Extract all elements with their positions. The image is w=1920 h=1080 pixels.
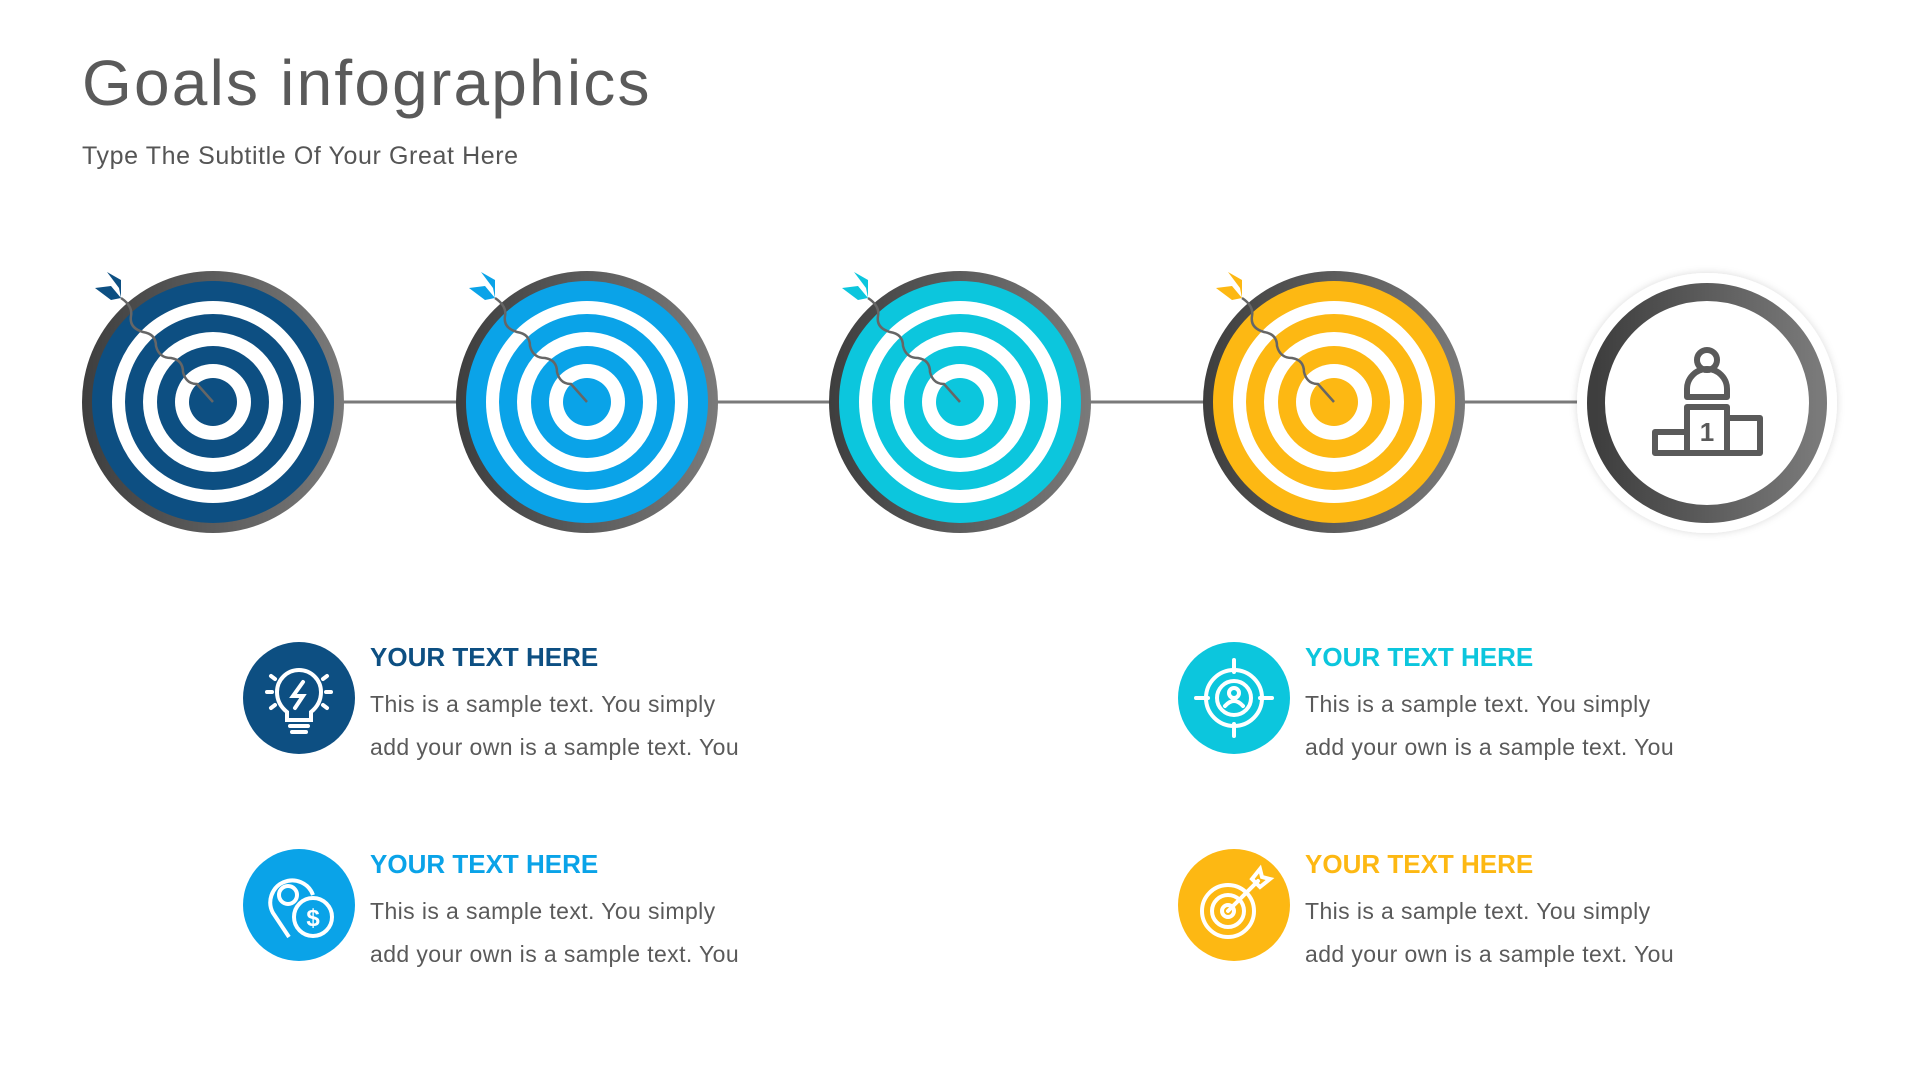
icon: target person bbox=[1178, 642, 1290, 754]
item 4 bbox=[1178, 849, 1674, 967]
subtitle: Type The Subtitle Of Your Great Here bbox=[82, 142, 519, 170]
targets row bbox=[82, 270, 1840, 536]
target 2 bbox=[456, 271, 718, 533]
icon: location money bbox=[243, 849, 355, 961]
final goal podium circle: 1 bbox=[1700, 417, 1714, 447]
icon: location money: $ bbox=[306, 905, 320, 932]
target 4 bbox=[1203, 271, 1465, 533]
body text: add your own is a sample text. You bbox=[1305, 941, 1674, 967]
heading: YOUR TEXT HERE bbox=[370, 849, 598, 879]
connector lines bbox=[340, 400, 1580, 404]
body text: This is a sample text. You simply bbox=[1305, 898, 1651, 924]
item 1 bbox=[243, 642, 739, 760]
body text: add your own is a sample text. You bbox=[370, 734, 739, 760]
body text: This is a sample text. You simply bbox=[370, 691, 716, 717]
body text bbox=[1305, 898, 1674, 967]
body text: add your own is a sample text. You bbox=[370, 941, 739, 967]
body text bbox=[370, 691, 739, 760]
heading: YOUR TEXT HERE bbox=[370, 642, 598, 672]
icon: podium bbox=[1655, 350, 1760, 453]
item 3 bbox=[1178, 642, 1674, 760]
heading: YOUR TEXT HERE bbox=[1305, 849, 1533, 879]
final goal podium circle bbox=[1577, 273, 1837, 533]
body text: add your own is a sample text. You bbox=[1305, 734, 1674, 760]
item 2 bbox=[243, 849, 739, 967]
target 1 bbox=[82, 271, 344, 533]
title: Goals infographics bbox=[82, 47, 652, 119]
body text bbox=[1305, 691, 1674, 760]
icon: lightbulb bbox=[243, 642, 355, 754]
icon: dartboard bbox=[1178, 849, 1290, 961]
target 3 bbox=[829, 271, 1091, 533]
body text bbox=[370, 898, 739, 967]
body text: This is a sample text. You simply bbox=[370, 898, 716, 924]
heading: YOUR TEXT HERE bbox=[1305, 642, 1533, 672]
body text: This is a sample text. You simply bbox=[1305, 691, 1651, 717]
